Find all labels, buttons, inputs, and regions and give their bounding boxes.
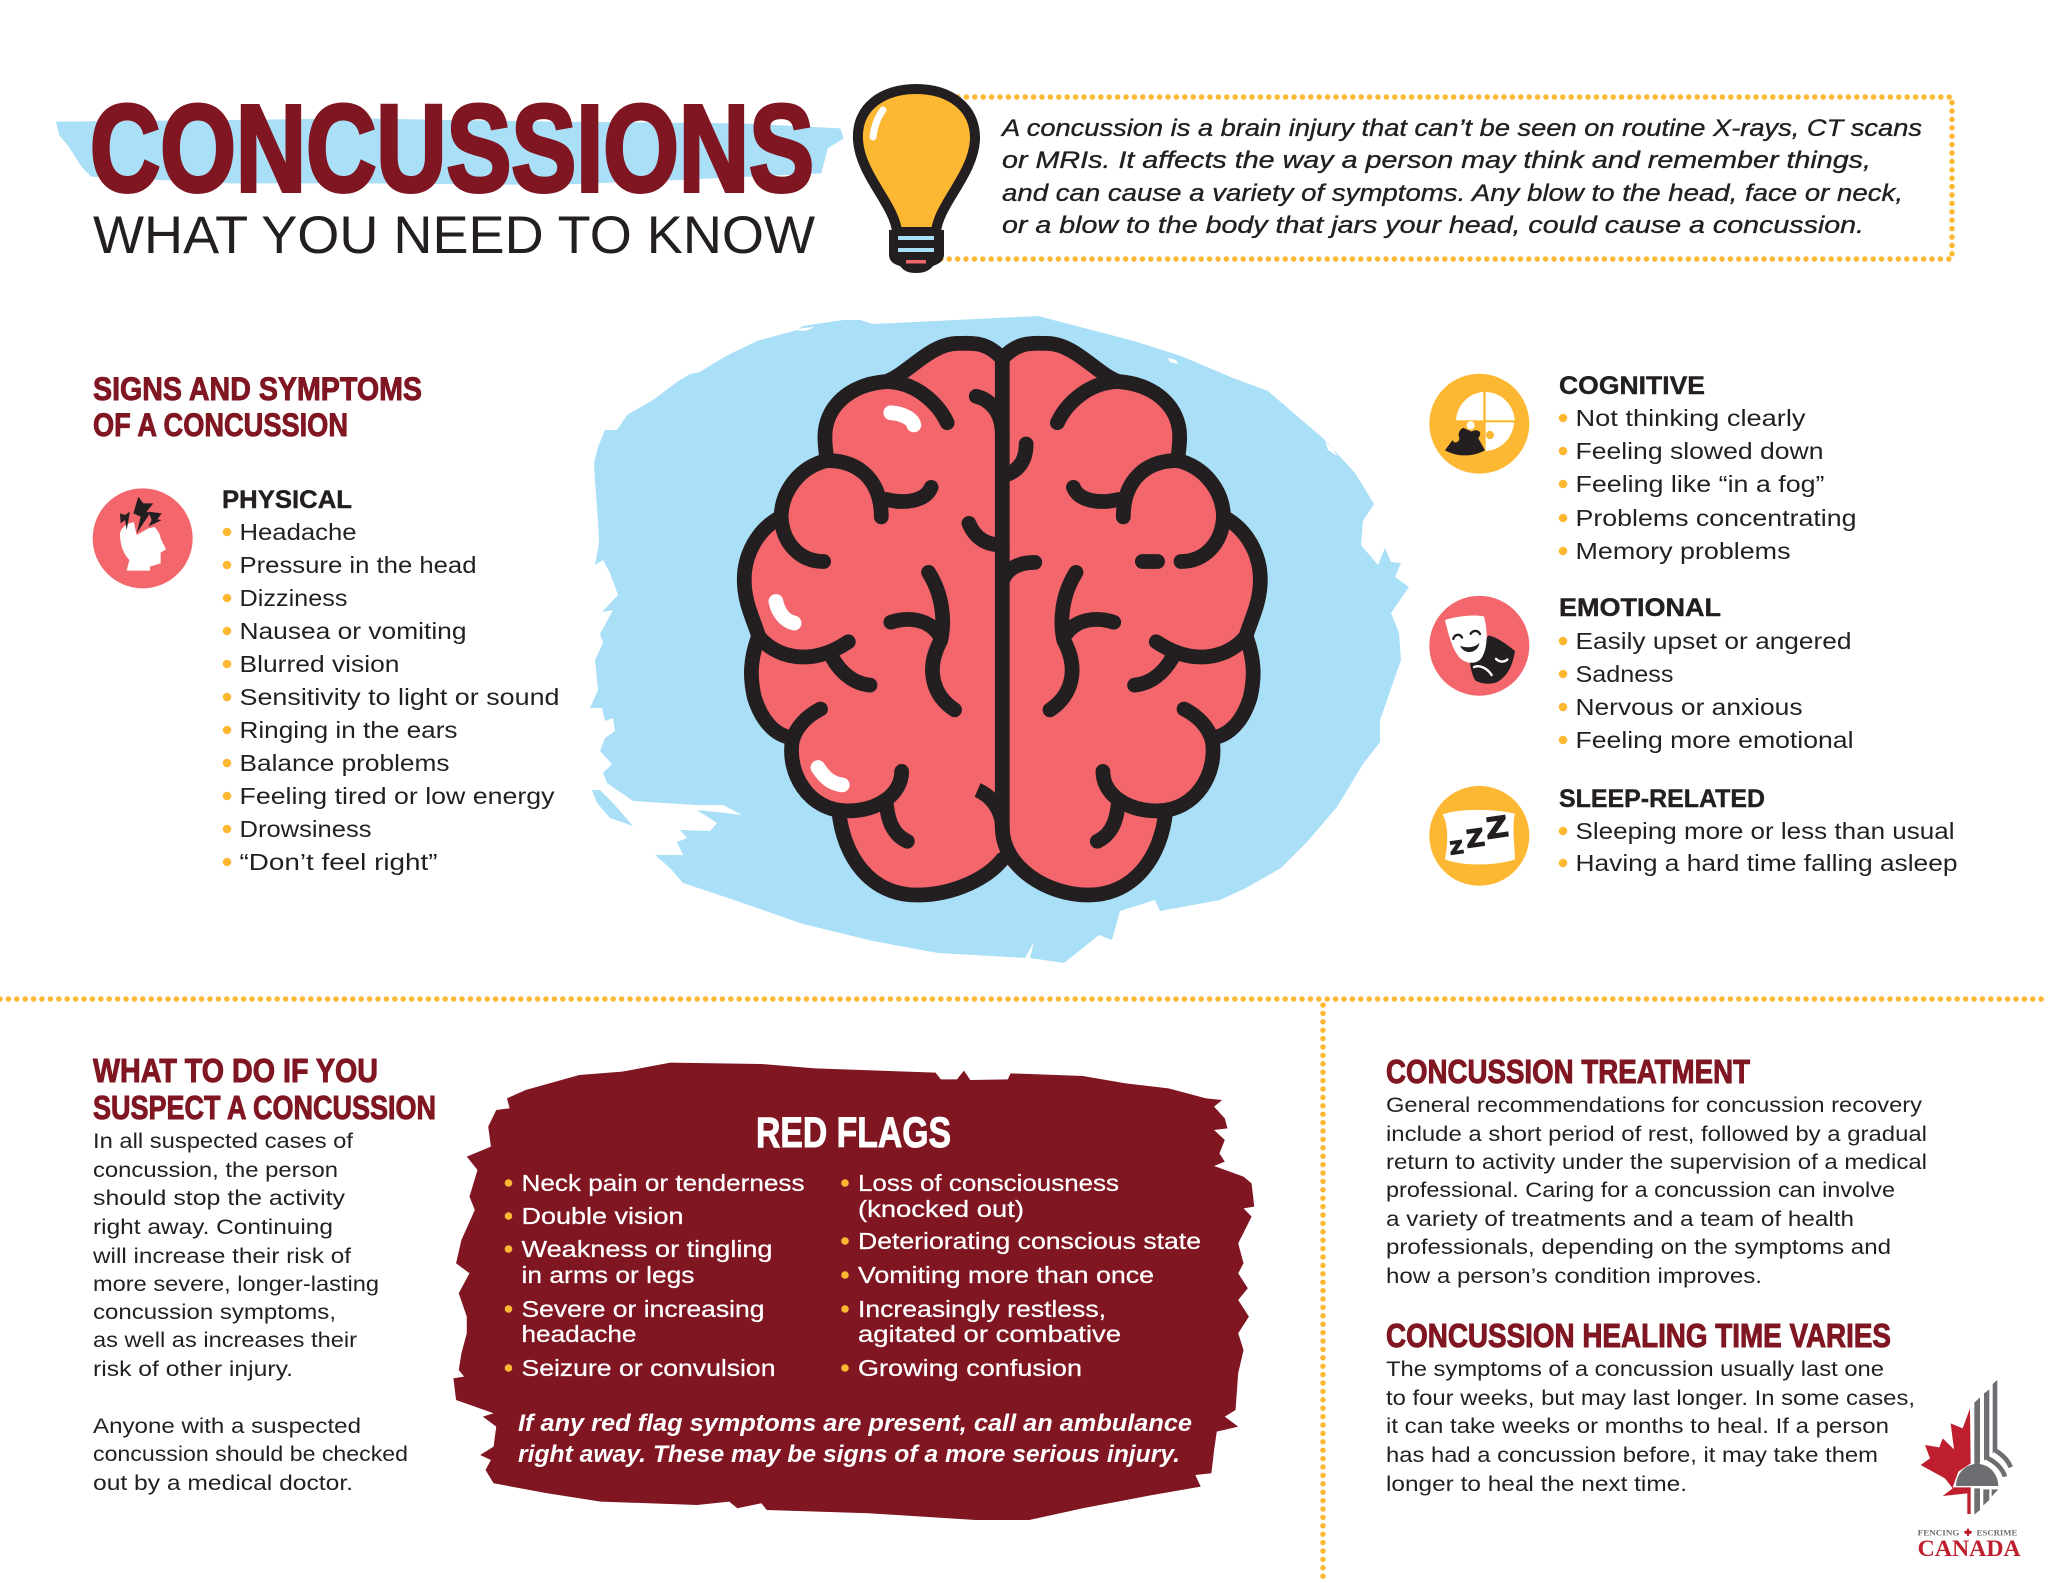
panel: red flags	[453, 1063, 1254, 1520]
red flags list: Severe or increasing	[522, 1296, 764, 1322]
red flags list: Growing confusion	[858, 1355, 1082, 1381]
list: physical symptoms	[222, 486, 560, 875]
text block: concussion treatment: professional. Caring for a concussion can involve	[1386, 1178, 1895, 1202]
intro box: or a blow to the body that jars your head, could cause a concussion.	[1002, 212, 1864, 239]
red flags list: Loss of consciousness	[858, 1170, 1119, 1196]
list: physical symptoms: Dizziness	[240, 585, 348, 611]
subtitle: WHAT YOU NEED TO KNOW	[93, 206, 815, 265]
text block: what to do: Anyone with a suspected	[93, 1414, 361, 1438]
text block: concussion treatment: return to activity under the supervision of a medical	[1386, 1150, 1927, 1174]
text block: concussion treatment: General recommendations for concussion recovery	[1386, 1093, 1922, 1117]
text block: what to do: concussion, the person	[93, 1158, 338, 1182]
list: cognitive symptoms: Memory problems	[1576, 538, 1790, 564]
list: physical symptoms: Feeling tired or low energy	[240, 783, 555, 809]
list: cognitive symptoms	[1559, 372, 1856, 564]
list: physical symptoms: Blurred vision	[240, 651, 400, 677]
red flags list: (knocked out)	[858, 1196, 1024, 1222]
icon: light bulb	[858, 89, 975, 273]
text block: what to do: In all suspected cases of	[93, 1129, 353, 1153]
list: cognitive symptoms: Feeling like “in a fog”	[1576, 471, 1824, 497]
red flags warning: If any red flag symptoms are present, call an ambulance	[518, 1410, 1192, 1437]
text block: what to do: right away. Continuing	[93, 1215, 333, 1239]
icon: physical headache	[93, 488, 193, 588]
list: physical symptoms: Drowsiness	[240, 816, 372, 842]
list: cognitive symptoms: COGNITIVE	[1559, 372, 1705, 400]
text block: what to do: risk of other injury.	[93, 1357, 293, 1381]
text block: healing time: it can take weeks or months to heal. If a person	[1386, 1414, 1889, 1438]
list: physical symptoms: “Don’t feel right”	[240, 849, 438, 875]
list: physical symptoms: Ringing in the ears	[240, 717, 458, 743]
list: sleep symptoms: Having a hard time falling asleep	[1576, 850, 1958, 876]
red flags list: Deteriorating conscious state	[858, 1228, 1201, 1254]
brain illustration	[744, 343, 1260, 895]
list: cognitive symptoms: Problems concentrating	[1576, 505, 1856, 531]
icon: sleep pillow: Z	[1465, 824, 1486, 854]
red flags heading: RED FLAGS	[756, 1109, 951, 1157]
list: emotional symptoms: Sadness	[1576, 661, 1674, 687]
text block: concussion treatment: a variety of treatments and a team of health	[1386, 1207, 1854, 1231]
text block: concussion treatment: include a short period of rest, followed by a gradual	[1386, 1122, 1927, 1146]
list: physical symptoms: Balance problems	[240, 750, 450, 776]
icon: sleep pillow: Z	[1484, 810, 1510, 846]
intro box: A concussion is a brain injury that can’t be seen on routine X-rays, CT scans	[1000, 115, 1922, 142]
text block: what to do: concussion should be checked	[93, 1442, 408, 1466]
title block	[56, 81, 844, 265]
red flags list: Seizure or convulsion	[522, 1355, 776, 1381]
list: emotional symptoms: Easily upset or angered	[1576, 628, 1852, 654]
text block: concussion treatment: professionals, depending on the symptoms and	[1386, 1235, 1891, 1259]
list: sleep symptoms: SLEEP-RELATED	[1559, 785, 1765, 813]
text block: healing time: The symptoms of a concussion usually last one	[1386, 1357, 1884, 1381]
logo: fencing canada	[1918, 1380, 2021, 1561]
intro box: or MRIs. It affects the way a person may think and remember things,	[1002, 147, 1871, 174]
text block: concussion treatment: CONCUSSION TREATMENT	[1386, 1054, 1750, 1091]
list: sleep symptoms	[1559, 785, 1958, 876]
list: emotional symptoms: Feeling more emotional	[1576, 727, 1854, 753]
icon: cognitive puzzle	[1429, 374, 1529, 474]
red flags list: in arms or legs	[522, 1262, 694, 1288]
text block: healing time: CONCUSSION HEALING TIME VARIES	[1386, 1318, 1891, 1355]
red flags list	[505, 1170, 1201, 1381]
heading: signs and symptoms: SIGNS AND SYMPTOMS	[93, 371, 422, 407]
intro box	[939, 97, 1952, 259]
logo mark	[1921, 1380, 2011, 1515]
heading: signs and symptoms	[93, 371, 422, 443]
text block: healing time: longer to heal the next time.	[1386, 1472, 1687, 1496]
list: emotional symptoms: EMOTIONAL	[1559, 594, 1721, 622]
icon: sleep pillow	[1429, 786, 1529, 886]
red flags list: agitated or combative	[858, 1321, 1121, 1347]
intro box: and can cause a variety of symptoms. Any blow to the head, face or neck,	[1002, 180, 1903, 207]
logo text: FENCING	[1918, 1528, 1960, 1538]
brain paint splash	[590, 316, 1409, 963]
red flags list: Increasingly restless,	[858, 1296, 1106, 1322]
icon: emotional masks	[1429, 596, 1529, 696]
logo text: ESCRIME	[1977, 1528, 2018, 1538]
text block: what to do: more severe, longer-lasting	[93, 1272, 379, 1296]
text block: what to do: out by a medical doctor.	[93, 1471, 353, 1495]
icon: sleep pillow: Z	[1449, 836, 1464, 858]
text block: what to do	[92, 1053, 436, 1495]
list: sleep symptoms: Sleeping more or less than usual	[1576, 818, 1954, 844]
red flags list: Weakness or tingling	[522, 1236, 772, 1262]
red flags list: headache	[522, 1321, 636, 1347]
list: cognitive symptoms: Not thinking clearly	[1576, 405, 1806, 431]
list: physical symptoms: Headache	[240, 519, 356, 545]
text block: what to do: should stop the activity	[93, 1186, 345, 1210]
text block: healing time: has had a concussion before, it may take them	[1386, 1443, 1878, 1467]
list: emotional symptoms	[1559, 594, 1854, 753]
text block: concussion treatment	[1386, 1054, 1927, 1288]
list: physical symptoms: Nausea or vomiting	[240, 618, 466, 644]
list: physical symptoms: Pressure in the head	[240, 552, 476, 578]
list: cognitive symptoms: Feeling slowed down	[1576, 438, 1824, 464]
text block: what to do: SUSPECT A CONCUSSION	[93, 1090, 436, 1127]
heading: signs and symptoms: OF A CONCUSSION	[93, 407, 348, 443]
list: emotional symptoms: Nervous or anxious	[1576, 694, 1802, 720]
red flags list: Double vision	[522, 1203, 684, 1229]
title brush stroke	[56, 118, 844, 185]
text block: concussion treatment: how a person’s condition improves.	[1386, 1264, 1762, 1288]
text block: what to do: as well as increases their	[93, 1328, 357, 1352]
list: physical symptoms: Sensitivity to light or sound	[240, 684, 560, 710]
list: physical symptoms: PHYSICAL	[222, 486, 352, 514]
text block: what to do: WHAT TO DO IF YOU	[93, 1053, 378, 1090]
title: concussions: CONCUSSIONS	[90, 81, 814, 218]
text block: healing time: to four weeks, but may last longer. In some cases,	[1386, 1386, 1915, 1410]
red flags warning: right away. These may be signs of a more serious injury.	[518, 1441, 1180, 1468]
red flags list: Vomiting more than once	[858, 1262, 1154, 1288]
text block: what to do: will increase their risk of	[92, 1244, 351, 1268]
logo text: CANADA	[1918, 1536, 2021, 1561]
text block: what to do: concussion symptoms,	[93, 1300, 336, 1324]
red flags list: Neck pain or tenderness	[522, 1170, 804, 1196]
red flags warning	[518, 1410, 1192, 1468]
text block: healing time	[1386, 1318, 1915, 1496]
